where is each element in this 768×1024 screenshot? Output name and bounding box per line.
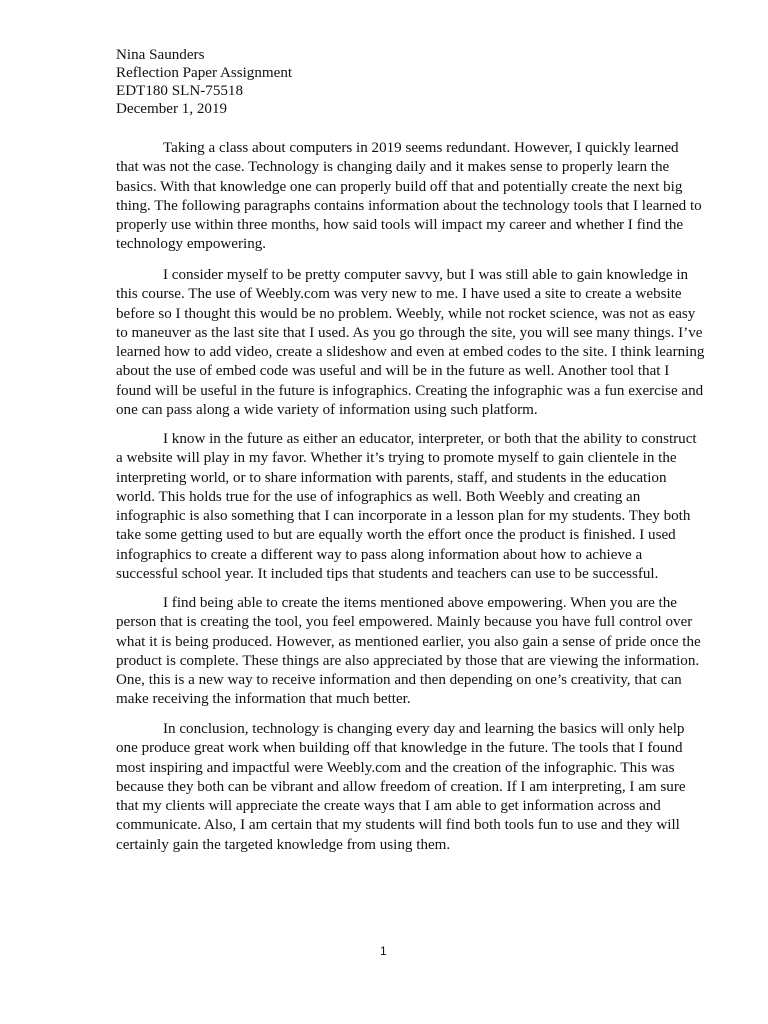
paragraph: tools learned: one can pass along a wide variety of information using such platform.	[116, 402, 538, 418]
paragraph: tools learned: to maneuver as the last site that I used. As you go through the site, you will see many things. I’ve	[116, 325, 702, 341]
paragraph: empowerment: One, this is a new way to receive information and then depending on one’s creativity, that can	[116, 672, 682, 688]
paragraph: tools learned	[116, 267, 704, 418]
paragraph: empowerment: make receiving the information that much better.	[116, 691, 411, 707]
paragraph: conclusion: one produce great work when building off that knowledge in the future. The tools that I found	[116, 740, 683, 756]
paragraph: conclusion: communicate. Also, I am certain that my students will find both tools fun to use and they will	[116, 817, 680, 833]
header block: December 1, 2019	[116, 101, 227, 117]
page number: 1	[380, 944, 387, 958]
paragraph: tools learned: this course. The use of Weebly.com was very new to me. I have used a site to create a website	[116, 286, 682, 302]
header block	[116, 47, 292, 117]
paragraph: career impact: world. This holds true for the use of infographics as well. Both Weebly and creating an	[116, 489, 640, 505]
paragraph: empowerment: product is complete. These things are also appreciated by those that are viewing the information.	[116, 653, 699, 669]
paragraph: introduction: basics. With that knowledge one can properly build off that and potentially create the next big	[116, 179, 682, 195]
paragraph: career impact: interpreting world, or to share information with parents, staff, and students in the education	[116, 470, 667, 486]
header block: EDT180 SLN-75518	[116, 83, 243, 99]
header block: Reflection Paper Assignment	[116, 65, 292, 81]
paragraph: introduction: thing. The following paragraphs contains information about the technology tools that I learned to	[116, 198, 702, 214]
paragraph: tools learned: I consider myself to be pretty computer savvy, but I was still able to gain knowledge in	[163, 267, 688, 283]
paragraph: introduction	[116, 140, 702, 252]
paragraph: career impact: I know in the future as either an educator, interpreter, or both that the ability to construct	[163, 431, 697, 447]
paragraph: empowerment: person that is creating the tool, you feel empowered. Mainly because you have full control over	[116, 614, 692, 630]
paragraph: career impact: infographic is also something that I can incorporate in a lesson plan for my students. They both	[116, 508, 690, 524]
paragraph: conclusion: that my clients will appreciate the create ways that I am able to get information across and	[116, 798, 661, 814]
header block: Nina Saunders	[116, 47, 204, 63]
paragraph: career impact	[116, 431, 697, 582]
paragraph: conclusion: In conclusion, technology is changing every day and learning the basics will only help	[163, 721, 684, 737]
paragraph: tools learned: found will be useful in the future is infographics. Creating the infographic was a fun exercise and	[116, 383, 703, 399]
paragraph: empowerment	[116, 595, 701, 707]
paragraph: empowerment: I find being able to create the items mentioned above empowering. When you are the	[163, 595, 677, 611]
paragraph: career impact: a website will play in my favor. Whether it’s trying to promote myself to gain clientele in the	[116, 450, 677, 466]
paragraph: tools learned: learned how to add video, create a slideshow and even at embed codes to the site. I think learning	[116, 344, 704, 360]
paragraph: tools learned: about the use of embed code was useful and will be in the future as well. Another tool that I	[116, 363, 669, 379]
paragraph: conclusion: most inspiring and impactful were Weebly.com and the creation of the infographic. This was	[116, 760, 674, 776]
paragraph: tools learned: before so I thought this would be no problem. Weebly, while not rocket science, was not as easy	[116, 306, 695, 322]
paragraph: conclusion: because they both can be vibrant and allow freedom of creation. If I am interpreting, I am sure	[116, 779, 686, 795]
paragraph: career impact: successful school year. It included tips that students and teachers can use to be successful.	[116, 566, 658, 582]
paragraph: introduction: properly use within three months, how said tools will impact my career and whether I find the	[116, 217, 683, 233]
paragraph: conclusion: certainly gain the targeted knowledge from using them.	[116, 837, 450, 853]
paragraph: conclusion	[116, 721, 686, 853]
paragraph: introduction: technology empowering.	[116, 236, 266, 252]
paragraph: empowerment: what it is being produced. However, as mentioned earlier, you also gain a sense of pride once the	[116, 634, 701, 650]
paragraph: career impact: infographics to create a different way to pass along information about how to achieve a	[116, 547, 642, 563]
paragraph: introduction: that was not the case. Technology is changing daily and it makes sense to properly learn the	[116, 159, 669, 175]
paragraph: introduction: Taking a class about computers in 2019 seems redundant. However, I quickly learned	[163, 140, 679, 156]
paragraph: career impact: take some getting used to but are equally worth the effort once the product is finished. I used	[116, 527, 676, 543]
